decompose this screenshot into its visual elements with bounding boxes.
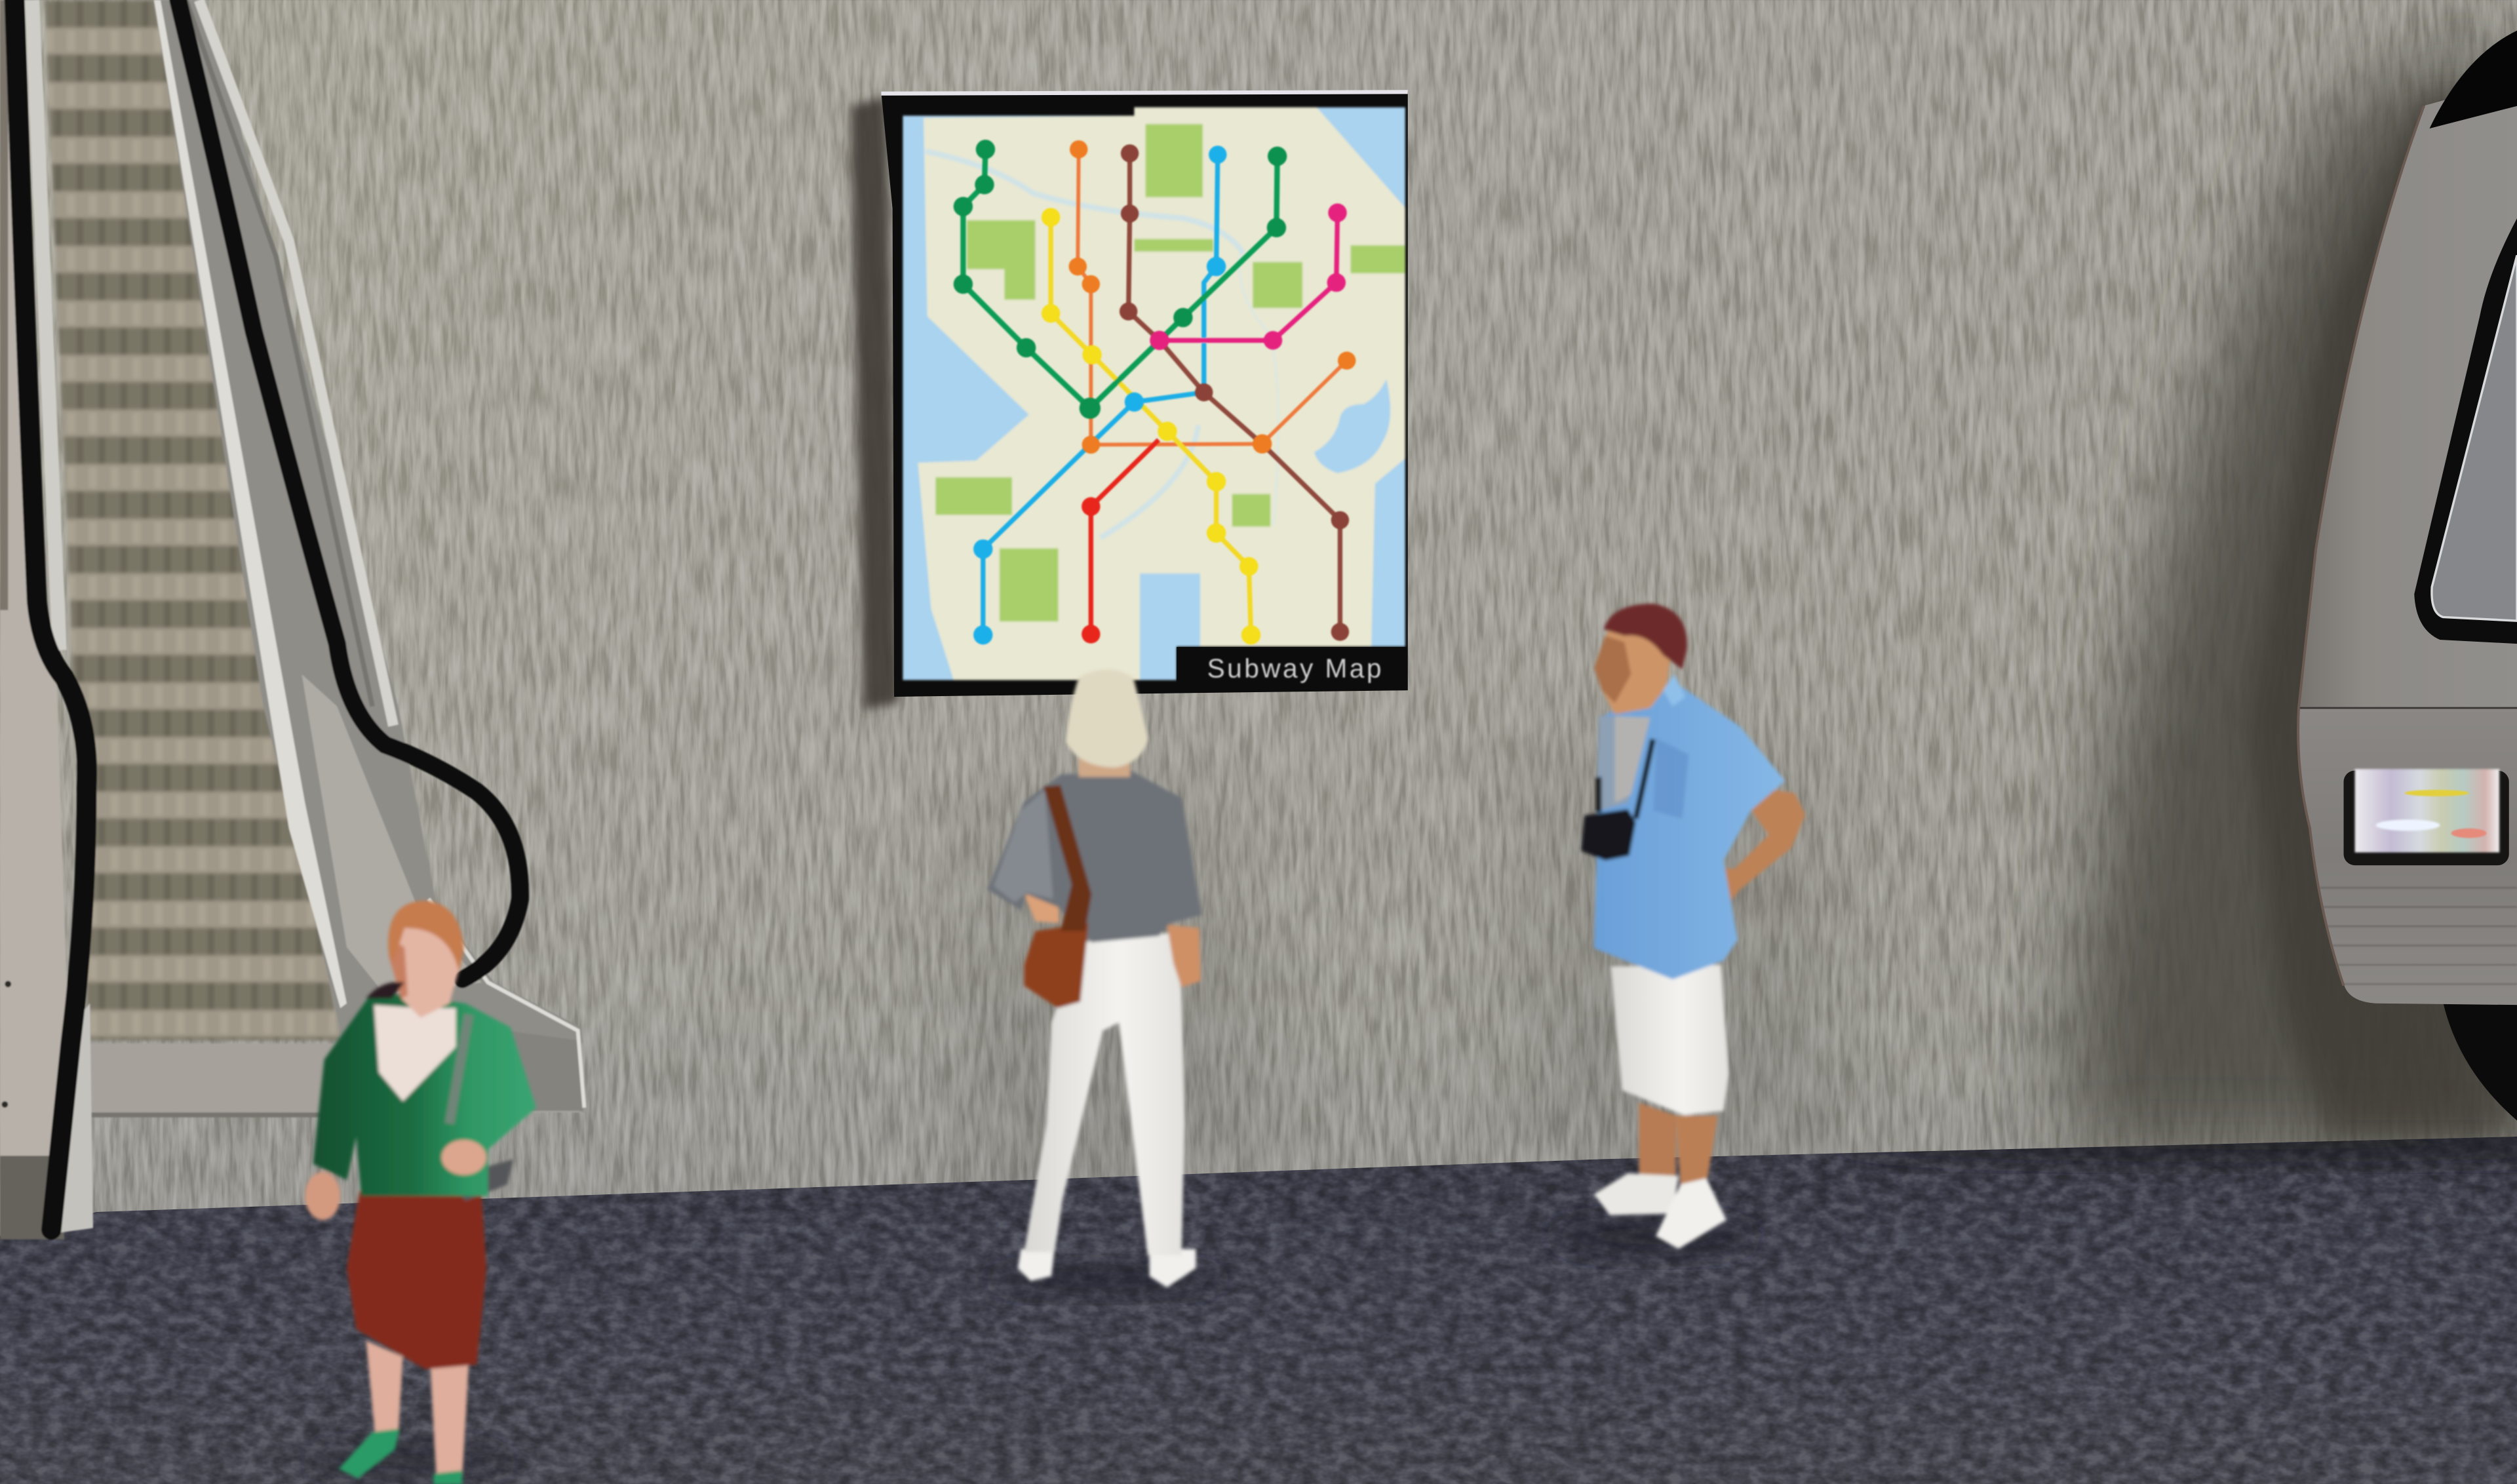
camera strap bbox=[1599, 739, 1653, 819]
window glass bbox=[2432, 255, 2517, 621]
undershirt bbox=[1599, 716, 1650, 811]
magenta line bbox=[1160, 213, 1337, 340]
blond hair bbox=[1066, 669, 1148, 768]
blouse bbox=[374, 1005, 456, 1101]
bag strap bbox=[450, 1015, 469, 1123]
landing edge highlight bbox=[429, 899, 584, 1108]
escalator steps bbox=[45, 0, 340, 1040]
map label bbox=[1177, 647, 1406, 690]
shoes bbox=[1594, 1173, 1679, 1215]
transit lines bbox=[963, 149, 1347, 635]
river bbox=[926, 151, 1243, 538]
collar bbox=[1663, 674, 1685, 707]
roof black piece bbox=[2430, 31, 2517, 128]
face shadow bbox=[389, 939, 408, 998]
stations bbox=[954, 140, 1356, 644]
parks bbox=[935, 124, 1405, 621]
hand on bag bbox=[441, 1140, 486, 1175]
right balustrade bbox=[154, 0, 584, 1112]
body seam bbox=[2299, 707, 2517, 709]
legs bbox=[1639, 1103, 1676, 1180]
shirt folds bbox=[1653, 739, 1688, 819]
green line bbox=[963, 149, 1278, 408]
lower body bbox=[2298, 708, 2517, 1005]
handrail left bbox=[14, 0, 87, 1230]
bag bbox=[1024, 923, 1088, 1008]
neck bbox=[1079, 754, 1130, 777]
hair bbox=[388, 901, 464, 973]
face bbox=[389, 923, 461, 1018]
skirt ridges bbox=[2320, 888, 2517, 984]
handrail right bbox=[178, 0, 520, 979]
green jacket bbox=[313, 992, 536, 1196]
hand bbox=[305, 1172, 340, 1220]
water inlet bottom bbox=[1140, 574, 1200, 680]
landing tip bbox=[482, 1027, 583, 1111]
headlight bbox=[2344, 769, 2509, 865]
shoes bbox=[339, 1429, 400, 1479]
brown line bbox=[1129, 153, 1340, 632]
left silver strip bbox=[32, 0, 60, 650]
lower landing bar bbox=[90, 1044, 584, 1112]
camera bbox=[1581, 809, 1636, 861]
red line bbox=[1091, 440, 1159, 634]
escalator bbox=[0, 0, 584, 1240]
figure: woman from behind bbox=[987, 669, 1201, 1287]
pants bbox=[1024, 933, 1184, 1255]
panel rivets bbox=[1, 981, 11, 1108]
window frame bbox=[2414, 218, 2517, 644]
orange line bbox=[1078, 149, 1347, 444]
bag strap bbox=[1044, 785, 1091, 931]
subway map poster bbox=[851, 90, 1408, 710]
poster black frame bbox=[881, 92, 1408, 697]
yellow line bbox=[1051, 217, 1251, 635]
silver rail strip bbox=[199, 0, 393, 726]
upper body bbox=[2299, 81, 2517, 708]
legs bbox=[366, 1340, 403, 1440]
water bay right bbox=[1314, 379, 1390, 473]
blue line bbox=[983, 155, 1218, 635]
figure: woman in green bbox=[305, 901, 536, 1484]
hands bbox=[1024, 894, 1059, 923]
shoes bbox=[1018, 1249, 1196, 1287]
land and water base bbox=[903, 107, 1405, 680]
carried bag bbox=[446, 1159, 514, 1201]
gray top bbox=[987, 771, 1201, 943]
undercarriage bbox=[2442, 995, 2517, 1120]
map artwork bbox=[903, 107, 1405, 680]
map label: Subway Map bbox=[1207, 654, 1384, 684]
red skirt bbox=[347, 1191, 486, 1369]
figure: man with camera bbox=[1581, 604, 1805, 1249]
blue shirt bbox=[1594, 685, 1785, 979]
wall shadow of poster bbox=[851, 96, 899, 710]
dark collar bbox=[366, 982, 404, 998]
train shadow on wall bbox=[2071, 49, 2517, 1156]
hair bbox=[1604, 604, 1687, 669]
floor bbox=[0, 1123, 2517, 1484]
arm bbox=[1706, 789, 1805, 910]
left side panel bbox=[0, 0, 72, 1156]
white shorts bbox=[1610, 965, 1729, 1115]
train bbox=[2298, 31, 2517, 1120]
figure shadows on wall bbox=[963, 754, 1846, 1188]
edge trim bbox=[2298, 106, 2424, 986]
face shadow bbox=[1594, 636, 1631, 703]
head bbox=[1594, 629, 1673, 714]
